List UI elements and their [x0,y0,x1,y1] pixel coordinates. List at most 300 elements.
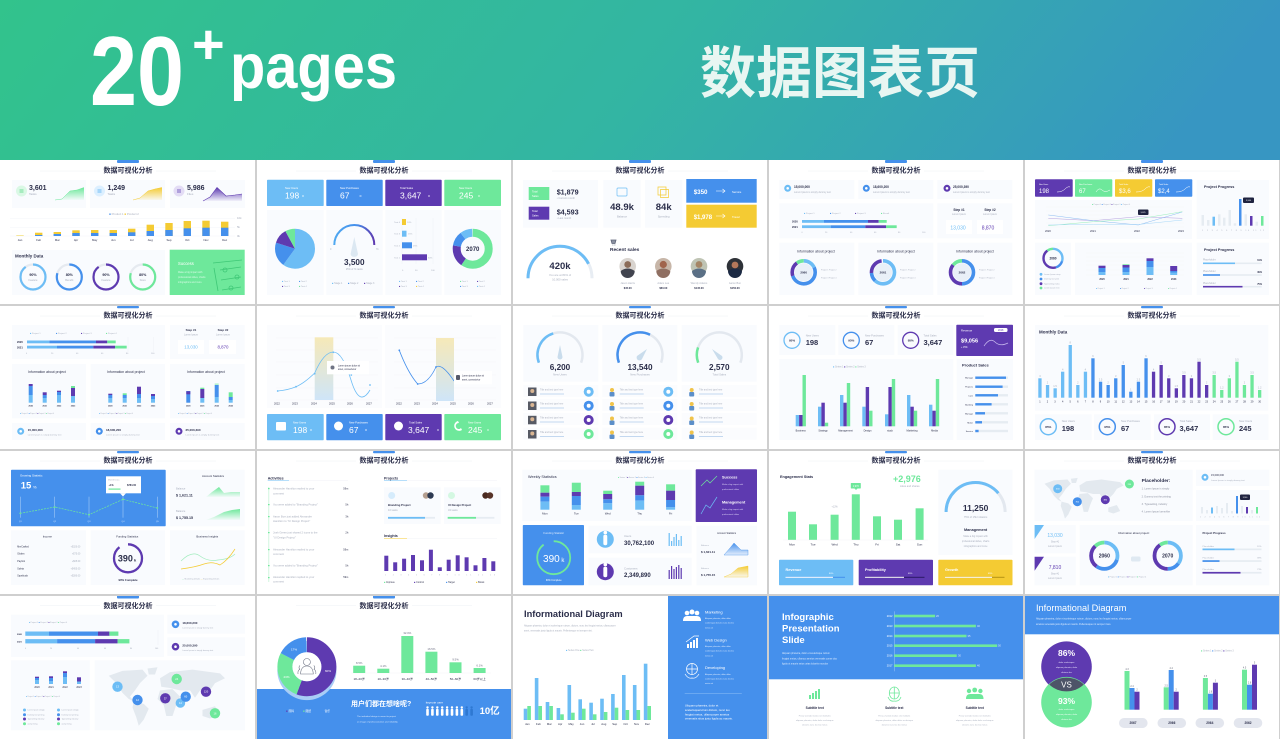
panel: income: +$75.00 [72,554,81,556]
panel: income: +$65.00 [72,561,81,563]
recent sales: Wendy Adams [691,281,708,285]
grouped bar chart: 2 [1176,689,1178,692]
panel: account statistics: Balance [701,568,710,570]
ring metric cards: New Users [1239,419,1253,423]
panel: world map with pins: 60 [184,695,188,699]
gauge: 3,500: ■ Stage 3 [364,282,375,285]
top metric strip: Lorem Ipsum is simply dummy text [873,191,910,194]
panel: blue sidebar: scelerisque dictums nunc leo leo [705,622,735,625]
stacked column chart: ■ Project 3 [1144,287,1153,290]
stacked horizontal bars: ■ Project 3 [855,212,866,215]
recent sales: Recent sales [610,247,640,253]
insights column chart: ■ Improve [384,581,395,584]
banner header [0,0,1280,160]
bar chart: age distribution: 6.1% [476,664,483,668]
projects: UI Design Project [448,503,471,507]
stacked horizontal bars [11,615,164,657]
bar chart: engagement stats: Sun [917,542,923,546]
stacked horizontal bars: 0 [25,648,26,650]
line chart: 2021 [1090,229,1096,233]
donut chart: 2070: ■ Text 2 [477,280,486,283]
people lists: Title and text type here [620,388,644,392]
bar chart: engagement stats: Mon [789,542,795,546]
line chart right: 2025 [450,402,456,406]
venn diagram: 93% [1058,696,1075,706]
panel: income: +$455.00 [71,568,81,570]
grouped bar chart: Feb [536,722,541,726]
panel: project progress column chart: 1 2 3 4 5 6 7 8 9 10 11 12 [1202,230,1265,232]
panel: blue header: Infographic [782,612,834,623]
donut panels: information about project: Information about project [956,250,994,254]
slide 7: line charts with highlight bands [267,306,501,440]
column chart: 1 2 3 4 5 6 7 8 9 10 11 12 [1200,516,1260,518]
legend: categories: ■ 原料 [286,709,294,713]
grouped bar chart: Aug [601,722,607,726]
ring metrics: 67 [865,338,873,347]
slide title: 数据可视化分析 [104,311,152,320]
bar chart: monthly data: 2 [1206,381,1208,385]
stacked column chart: ■ Project 2 [1120,287,1129,290]
gauge: 3,500: 25% of 7k tasks [346,268,364,271]
grouped bar chart: 4.4 [1170,667,1174,670]
panel: project progress bars [1197,243,1269,295]
metric card: Lorem Ipsum is simply dummy text [1211,479,1245,482]
legend: categories: ■ 音乐 [322,709,330,713]
panel: spending [645,180,682,228]
panel: steps: Lorem Ipsum [216,334,230,336]
bar chart: years: 30 [958,654,961,658]
panel: stat cards: 5,986 [187,185,205,192]
bar chart: age distribution: 4.1% [380,664,387,668]
icon row and subtitles: Subtitle text [885,706,904,710]
bar chart: monthly data: 4 [1062,367,1064,371]
line chart: 2022 [1134,229,1140,233]
bar chart: monthly data: 10 [1107,400,1110,404]
slide 11: growing statistic [11,451,245,585]
pie chart: ■ Text 1 [282,280,291,283]
donut chart: 2070: ■ Text 1 [460,280,469,283]
panel: stacked columns and legend: Lorem Ipsum simply [28,709,44,712]
stacked horizontal bars: ■ Project 1 [30,332,41,335]
grouped bar chart: 1.8 [1209,691,1213,694]
ring metrics: New Users [806,334,819,338]
grouped bar chart [779,359,953,440]
stacked horizontal bars: 20 [825,232,828,234]
panels: chart backgrounds [267,210,501,295]
pictogram: keynote users: 10亿 [480,705,500,717]
ring metric cards: 3,647 [1180,424,1198,433]
bar chart: monthly data: 25 [1220,400,1224,404]
kpi cards: Total Sales [400,186,414,190]
panel: donuts [1080,525,1193,585]
description: amet, venenatis justo ligula ut mauris. Pellentesque mi semper nisi. [524,630,593,632]
slide 8: gauges and people lists [523,306,757,440]
bar chart: monthly data: 21 [1190,400,1193,404]
heading: 20+ pages: 20 [90,16,184,126]
card: growing statistic: Growing Statistic [20,474,43,478]
description: Aliquam pharetra, dolor et scelerisque rutrum, dictum, nunc leo feugiat metus, ullamcorper [524,624,616,628]
card: growing statistic: Q3 [88,521,91,523]
panel: balance [603,180,641,228]
horizontal bar chart: 50% [428,257,432,259]
bar chart: monthly data: 1.2 [1220,386,1224,390]
panel: blue sidebar: feugiat metus, ullamcorper ametus [685,712,730,716]
panel: stacked columns and legend: ■ Project 1 ■ Project 2 ■ Project 3 ■ Project 4 [26,695,60,698]
stacked horizontal bars: 40 [850,232,853,234]
pictogram: keynote users: keynote user [426,700,443,704]
bar chart: engagement stats: Engagement Stats [780,475,813,479]
grouped bar chart: 4.3 [1125,668,1129,671]
grouped bar chart: Management [838,430,853,432]
slide 12: activities, projects, insights [268,451,501,584]
bar chart: engagement stats: Thu [853,542,859,546]
kpi cards with icons: 245 [468,425,482,435]
column chart: 3,960 [1243,497,1247,499]
bar chart: age distribution: 16.5% [427,647,436,651]
card: success and management: Make a big impact with [722,483,744,486]
panel: steps: Lorem Ipsum [184,334,198,336]
panel: income: +$280.00 [71,576,81,578]
card: service [686,179,757,203]
stacked horizontal bars: 100 [151,353,155,355]
panel: users: Users [624,534,632,538]
panel: project progress bars: 75% [1257,283,1263,286]
panel: blue sidebar: Marketing [705,610,723,614]
panel: world map: 2. Dummy text the printing [1142,496,1171,498]
panels: stacked column charts: 2022 [137,406,142,408]
panel: blue sidebar: scelerisque dictums nunc leo leo [705,678,735,680]
bar chart: years: 2015 [887,644,893,648]
panel: blue sidebar: metus sit [705,626,713,629]
ring metrics: 95% [789,338,795,342]
grouped bar chart: 2062 [1244,721,1252,725]
gauge: 3,500 [330,225,379,285]
activities list: 2h [345,530,349,534]
panels: stacked column charts: ■ Project 1 ■ Project 2 ■ Project 3 ■ Project 4 [178,412,212,415]
panel: stat cards: Tasks [29,192,37,196]
venn diagram: dolor scelerisque [1059,708,1075,711]
panel: steps: 13,030 [184,344,198,350]
panel: monthly data rings: Monthly Data [15,254,44,258]
ring metrics: 95% [848,338,855,342]
panel: project progress [1196,525,1269,585]
stacked horizontal bars: ■ Project 2 [56,332,67,335]
slide title: 数据可视化分析 [104,166,152,175]
panel: total sales: $4,593 [557,208,579,216]
panel: world map with pins: 120 [204,690,209,694]
heading: Informational Diagram [524,609,623,619]
donut panel: 2060: Lorem Ipsum Iren [1044,288,1060,290]
slide 15: world map and project info [1035,451,1269,585]
insights column chart: Insights [384,534,398,538]
grouped bar chart: 5 [1254,662,1256,665]
metric cards [167,615,245,656]
bar chart: monthly data: 4 [1062,400,1064,404]
bar chart: monthly data: 2 [1047,381,1049,385]
gauge: 3,500: 0 [330,248,332,251]
horizontal bar chart: 100 [431,270,435,272]
card: success and management [696,469,757,522]
icon: team [966,688,984,699]
horizontal bar chart: ■ Text 2 [416,280,425,283]
bar chart: age distribution: 18~20岁 [353,676,365,681]
panel: gauge and management: professional slides, charts [962,540,990,543]
panel: blue header [769,594,1024,679]
grouped bar chart: Marketing [907,430,918,432]
panel: total sales: Sales [532,194,539,198]
bar chart: monthly data: 1.5 [1053,384,1057,388]
panel: world map with pins: 24 [175,677,179,681]
icon: sliders [213,260,242,291]
panel: product sales: Service [966,430,974,433]
kpi cards: New Users [285,186,299,190]
icon row and subtitles: Fresa vivendo mattus sini mollartis [959,714,991,717]
grouped bar chart: Sep [612,722,618,726]
venn diagram: VS [1061,680,1072,690]
bar chart: age distribution: 32.0% [403,631,412,635]
slide 2: kpi cards and four charts [267,160,501,295]
tooltip: amet, consectetur [338,368,356,371]
panel: donuts: 2060 [1099,554,1110,560]
panel: business insights: — Marketing Details — Expanding Details [182,578,219,580]
slide title: 数据可视化分析 [872,166,920,175]
slide title: 数据可视化分析 [1128,311,1176,320]
people lists: Title and text type here [620,431,644,434]
slide 10: monthly data bars [1035,306,1268,440]
slide 16: projects map [11,594,245,730]
stacked bar chart: product 1 and 2 by month: Jul [130,238,134,242]
panel: world map with pins: 37 [164,696,167,700]
recent sales: $60.00 [659,286,668,290]
stacked column chart: 2022 [1147,278,1153,281]
donut panels: information about project: 2060 [800,270,807,274]
stacked horizontal bars: 80 [898,232,901,234]
callout: success card: Make a big impact with [178,271,203,274]
panel: account statistics: Account Statistics [202,474,225,478]
ring metrics: 198 [806,338,818,347]
panel: gauge and management: infographics and more [964,545,988,548]
stacked horizontal bars: ■ Project 2 [830,212,841,215]
grouped bar chart: 3.5 [1204,675,1208,678]
activities list: comment [273,552,284,556]
donut chart: user share: 17% [291,648,297,652]
icon row and subtitles [796,687,994,727]
slide title [296,594,472,610]
grouped bar chart: ■ Series 1 ■ Series 2 ■ Series 3 [1201,650,1234,653]
panel: stat cards: Files [187,192,194,196]
kpi cards with icons: 3,647 [408,425,430,435]
venn diagram [1041,641,1092,728]
step cards: Lorem Ipsum [1048,577,1062,580]
card: success and management: Success [722,476,737,480]
panel: account statistics: Account Statistics [717,532,737,535]
pictogram: keynote users [426,700,500,717]
stacked horizontal bars: ■ Project 3 [81,332,92,335]
gauge: 3,500: 7k [376,248,379,251]
panel: weekly stacked columns: Tue [574,512,579,516]
panel: weekly stacked columns: Weekly Statistics [528,475,557,479]
projects: 10 tasks [388,508,398,512]
stacked bar chart: product 1 and 2 by month: 0k [237,234,241,238]
icon row and subtitles: Fresa vivendo mattus sini mollartis [799,714,831,717]
grouped bar chart: 4.5 [1243,667,1247,670]
panel: stacked columns and legend: Dummy text printing [28,713,44,716]
bar chart: age distribution: 20~30岁 [378,676,389,681]
bar chart: years: 50 [998,644,1001,648]
line chart [1035,200,1192,239]
panel: steps: 8,870 [982,226,994,232]
grouped bar chart: 2.4 [1130,685,1134,688]
activities list: Josh Green just shared 2 icons to the [273,530,318,534]
panel: users [589,526,692,553]
card: profitability: 65% [908,573,912,575]
tooltip: Lorem ipsum dolor sit [462,374,484,378]
grouped bar chart: stock [887,430,894,432]
line chart left [267,325,382,408]
venn diagram: dolor scelerisque [1059,661,1075,664]
icon row and subtitles: aliquam pharetra, dolor dolor scelerisque [875,719,914,722]
top metric strip: 18,600,200 [873,185,889,189]
projects: Branding Project [388,503,411,507]
gauge: 420k [528,246,592,282]
bar chart: monthly data: 2.5 [1099,377,1103,381]
card: travel: Travel [732,215,740,219]
donut panel: 2060: Dummy text print [1044,278,1060,281]
card: service: $350 [694,189,708,196]
ring metric cards: 245 [1239,424,1252,433]
bar chart: monthly data: 1 [1130,387,1132,391]
panel: weekly stacked columns: Mon [542,512,548,516]
stacked horizontal bars: ■ Project 1 ■ Project 2 ■ Project 3 ■ Project 4 [29,621,67,624]
line chart right: 2024 [432,402,438,406]
bar chart: age distribution: 9.5% [452,658,459,662]
grouped bar chart: Jul [591,722,595,726]
panel: account statistics [170,470,245,526]
activities list: Alexander Hamilton replied to your [273,548,314,552]
callout: success card: infographics and more [178,281,202,284]
panels: stacked column charts: 2023 [228,406,234,408]
stacked horizontal bars: 2021 [17,642,23,644]
panel: world map: 1. Lorem Ipsum is simply [1142,488,1170,490]
step cards: 7,810 [1049,565,1061,571]
panel: project progress bars: 61% [1257,259,1263,262]
panel: monthly data rings [12,250,165,295]
kpi cards with sparklines: 67 [1079,189,1086,195]
bottom metric strip: 25,000,390 [186,428,201,432]
step cards [1035,525,1076,585]
activities list: Hamilton to "UI Design Project" [273,519,310,523]
pie chart [282,239,308,288]
stacked column chart [1075,243,1192,295]
bar chart: monthly data: 3 [1039,374,1041,378]
donut chart: 2070: ■ Text 4 [477,285,486,288]
panel: gauge and management: Management [964,528,988,532]
line chart right: 2026 [468,402,474,406]
panels: stacked column charts: 2020 [186,406,191,408]
callout: success card: Success [178,261,194,266]
slide title: 数据可视化分析 [872,311,920,320]
activities list: 59m [343,575,348,579]
panel: monthly data rings: Benefit [65,278,74,282]
panel: blue sidebar: metus sit [705,654,713,657]
bar chart: monthly data: 16 [1152,400,1156,404]
panel: steps: Step #1 [186,328,197,332]
panel: steps: Lorem Ipsum [952,213,966,216]
kpi cards with icons: New Purchases [349,420,368,424]
kpi cards with sparklines [1035,179,1192,197]
ring metric cards: 67 [1121,424,1129,433]
bar chart: monthly data: 27 [1236,400,1239,404]
panels: stacked column charts: 2022 [214,406,220,408]
panel: blue header: Presentation [782,624,840,634]
icon: person [603,531,607,545]
horizontal bar chart [394,218,435,288]
grouped bar chart: Strategy [818,430,828,432]
panel: blue sidebar: Developing [705,665,725,670]
bar chart: monthly data: 3 [1191,374,1193,378]
line chart right: 2027 [487,402,493,406]
stacked horizontal bars: 100 [155,648,158,650]
panel: stacked columns and legend: and printing [28,722,37,725]
panel: gauge and management: Make a big impact with [963,535,988,538]
bar chart: years: 20 [936,614,939,618]
tooltip: Lorem ipsum dolor sit [338,364,360,368]
people lists: Title and text type here [540,416,564,420]
panel: monthly data rings: 90% [102,273,110,277]
step cards: Lorem Ipsum [1048,545,1062,548]
panel: steps: 13,030 [950,226,966,232]
activities list: 3h [345,514,349,518]
legend: categories [286,709,330,713]
horizontal bar chart: 10% [407,222,411,224]
stacked bar chart: product 1 and 2 by month: Oct [185,238,190,242]
panel: world map: Placeholder: [1142,478,1171,484]
bar chart: monthly data: 13 [1130,400,1133,404]
panel: blue header: ligula ut mauris setus urtas lobortis mundon [782,663,829,666]
card: growing statistic: Q1 [19,521,23,523]
grouped bar chart: Nov [634,722,640,726]
bar chart: monthly data: 4 [1085,367,1087,371]
stacked bar chart: product 1 and 2 by month: Mar [55,238,60,242]
card: funding statistic: Funding Statistic [543,531,565,535]
panel: income: +$320.00 [71,546,81,548]
panel: funding statistics: 90% Complete [118,578,138,582]
card: growing statistic: Q4 [122,521,125,523]
panel: project progress: Placeholder [1202,568,1214,571]
venn diagram: aliquam pharetra, dolor [1056,713,1077,716]
card: revenue [956,325,1013,356]
panel: steps [170,325,245,359]
people lists: Title and text type here [699,431,723,434]
stacked horizontal bars: 60 [874,232,877,234]
panel: steps: 8,870 [218,344,229,350]
panel: blue sidebar: metus sit [705,682,713,685]
slide 9: grouped bars and product sales [779,306,1013,440]
ring metrics [779,325,953,355]
panel: balance: 48.9k [610,202,635,213]
donut chart: user share: 60% [325,669,331,673]
panel: gauge and management: 11,250 [963,503,989,513]
panel: project progress: 38% [1257,558,1262,560]
grouped bar chart: Mar [547,722,552,726]
stacked horizontal bars [779,203,933,238]
card: revenue: Revenue [786,568,801,572]
panel: weekly stacked columns: ■ Series 1 ■ Series 2 ■ Series 3 ■ Series 4 [618,476,654,479]
panel: income: Income [43,534,52,538]
bar chart: monthly data: 3 [1168,374,1170,378]
card: growing statistic: Q2 [53,521,57,523]
activities list: Aaron Burr just added Alexander [273,514,312,518]
